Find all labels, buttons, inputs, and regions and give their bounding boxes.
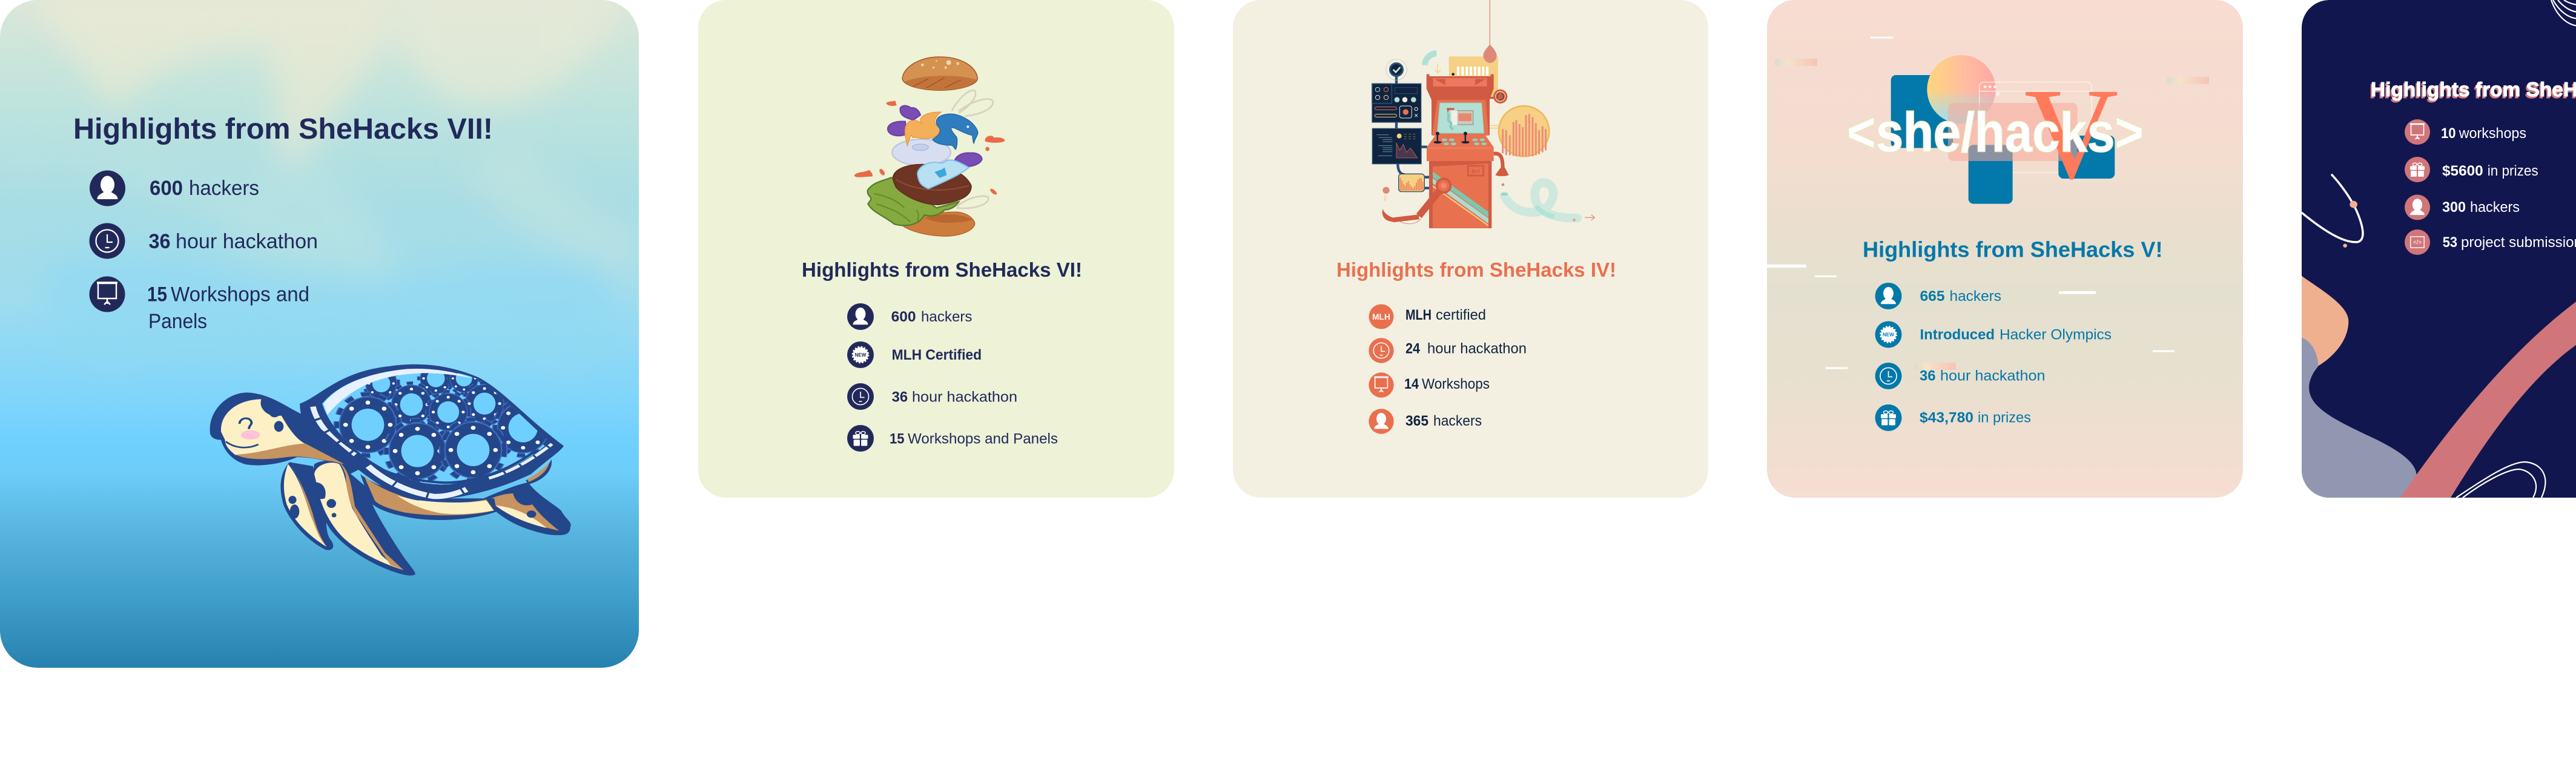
stat: 36 hour hackathon: [90, 223, 318, 259]
icon: clock: [847, 383, 874, 410]
cabinet: [1427, 74, 1494, 135]
purple blobs: [888, 105, 982, 166]
lettuce: [868, 177, 959, 225]
stat: 365 hackers: 365: [1405, 413, 1428, 429]
yellow backing card: [1449, 56, 1498, 97]
icon: gift: [1875, 404, 1901, 431]
stat: 15 workshops and panels: 15: [890, 431, 905, 447]
large V: V: [2024, 61, 2119, 206]
swirl: [1488, 95, 1496, 101]
stat: 24 hour hackathon: hour hackathon: [1427, 340, 1527, 357]
stat: 365 hackers: hackers: [1433, 413, 1482, 429]
illustration: arcade machine with robot arm: [1372, 0, 1594, 228]
heading: Highlights from SheHacks V!: [1863, 237, 2163, 262]
stat: 36 hour hackathon: hour hackathon: [176, 230, 318, 253]
stat: 36 hour hackathon: 36: [892, 389, 908, 406]
pink band: [2400, 286, 2576, 498]
bottom bun: [898, 212, 975, 236]
stat: MLH certified: [1369, 304, 1486, 329]
shell rim: [323, 369, 473, 415]
stat: 36 hour hackathon: 36: [1920, 368, 1935, 384]
stat: 15 workshops and panels: [90, 276, 309, 333]
shell: [300, 364, 564, 501]
peach blob: [2302, 276, 2348, 373]
icon: clock: [1369, 338, 1394, 363]
stat: 24 hour hackathon: 24: [1405, 340, 1421, 357]
hanging drop: [1488, 0, 1491, 45]
stat: 365 hackers: [1369, 409, 1482, 434]
stat: 10 workshops: [2405, 119, 2526, 145]
browser window outline: [1980, 82, 2092, 173]
stat: 14 workshops: Workshops: [1422, 376, 1490, 392]
front flipper: [314, 461, 415, 576]
stat: prizes: $43,780: [1920, 409, 1973, 426]
stat: 600 hackers: [847, 303, 973, 330]
panel: SheHacks VII: [0, 0, 639, 668]
stat: prizes: [1875, 404, 2031, 431]
stat: 15 workshops and panels: Panels: [148, 310, 207, 333]
stat: MLH certified: MLH: [1405, 307, 1432, 323]
wordmark: <she/hacks>: [1847, 101, 2144, 163]
stat: prizes: in prizes: [1978, 409, 2031, 426]
robot arm: [1419, 186, 1444, 216]
stat: 36 hour hackathon: [847, 383, 1017, 410]
nozzle: [1494, 154, 1503, 168]
panel: SheHacks V: [1767, 0, 2243, 498]
illustration: arcade machine with robot arm: $>I: [1471, 168, 1480, 174]
arcade screen: [1437, 103, 1484, 133]
top bun: [902, 57, 977, 90]
stat: 36 hour hackathon: hour hackathon: [1940, 368, 2046, 384]
icon: projector: [90, 276, 125, 312]
stat: 600 hackers: hackers: [189, 177, 259, 200]
icon: person: [1875, 283, 1901, 309]
heading: Highlights from SheHacks IV!: [1336, 259, 1616, 281]
illustration: turtle with gears on shell: [210, 361, 571, 576]
stat: 600 hackers: hackers: [921, 309, 973, 325]
stat: 300 hackers: [2405, 195, 2520, 220]
stat: 10 workshops: 10: [2441, 125, 2456, 142]
icon: person: [1369, 409, 1394, 434]
stat: MLH certified: MLH Certified: [892, 347, 982, 363]
heading: Highlights from SheHacks VI!: [802, 259, 1082, 282]
panel: SheHacks VI: [698, 0, 1174, 498]
shell gears: [337, 361, 551, 482]
card background: [0, 0, 639, 668]
CD: [892, 139, 951, 165]
stat: 15 workshops and panels: Workshops and Panels: [908, 431, 1058, 447]
stat: 300 hackers: hackers: [2470, 199, 2520, 216]
icon: gift: [2405, 157, 2430, 182]
stat: 53 project submissions: [2405, 229, 2576, 255]
stat: introduced hacker olympics: [1875, 321, 2112, 348]
icon: clock: [90, 223, 125, 259]
blue block left: [1891, 75, 1953, 148]
top right swirl: [2551, 0, 2576, 26]
card background: [1233, 0, 1708, 498]
panel: SheHacks III: [2302, 0, 2576, 499]
stat: introduced hacker olympics: Hacker Olympics: [2000, 327, 2112, 343]
heading: Highlights from SheHacks VII!: [73, 113, 493, 145]
stat: 15 workshops and panels: 15: [147, 283, 167, 306]
icon: new badge: [1875, 321, 1901, 348]
icon: code: </>: [2413, 239, 2422, 246]
stat: 36 hour hackathon: [1875, 363, 2046, 389]
icon: new badge: [847, 341, 874, 368]
stat: MLH certified: certified: [1436, 307, 1486, 323]
stat: introduced hacker olympics: Introduced: [1920, 327, 1995, 343]
coin slot: [1468, 166, 1484, 176]
big chart circle: [1488, 125, 1499, 128]
left panels: [1372, 59, 1429, 192]
icon: gift: [847, 425, 874, 452]
illustration: exploded burger with logos: [854, 57, 1005, 236]
stat: 300 hackers: 300: [2442, 199, 2466, 216]
stat: 665 hackers: 665: [1920, 288, 1945, 305]
stat: 36 hour hackathon: hour hackathon: [912, 389, 1017, 406]
icon: new badge: NEW: [855, 352, 867, 358]
stat: 14 workshops: [1369, 372, 1490, 398]
arrow: [1585, 215, 1594, 220]
stat: 36 hour hackathon: 36: [149, 230, 171, 253]
ketchup splashes: [854, 100, 1005, 196]
head and neck: [210, 392, 366, 474]
gradient sphere: [1927, 55, 1996, 124]
icon: person: [2405, 195, 2430, 220]
back flipper: [280, 462, 333, 550]
rear flipper: [484, 483, 571, 535]
console: [1427, 136, 1494, 161]
stat: 10 workshops: workshops: [2459, 125, 2526, 142]
card background: [698, 0, 1174, 498]
stat: 15 workshops and panels: Workshops and: [171, 283, 309, 306]
belly: [360, 474, 497, 520]
stat: 53 project submissions: 53: [2443, 234, 2457, 251]
twitter cloud: [917, 160, 969, 189]
patty: [893, 164, 971, 205]
icon: new badge: NEW: [1883, 332, 1894, 337]
card background: [1767, 0, 2243, 498]
python blue sauce: [933, 114, 978, 150]
illustration: she/hacks V logo: [1847, 55, 2144, 206]
stat: MLH certified: [847, 341, 982, 368]
icon: person: [90, 171, 125, 206]
icon: projector: [1369, 372, 1394, 398]
cheese: [905, 112, 941, 146]
icon: MLH: [1369, 304, 1394, 329]
blue block right: [2058, 136, 2115, 179]
panel: SheHacks IV: [1233, 0, 1708, 498]
onion rings: [952, 90, 993, 208]
translucent pink block: [1948, 103, 2078, 161]
card background: [2302, 0, 2576, 498]
icon: person: [847, 303, 874, 330]
stat: 600 hackers: 600: [891, 309, 916, 325]
bottom loops: [2456, 462, 2545, 498]
stat: 600 hackers: [90, 171, 259, 206]
stat: prizes: in prizes: [2488, 163, 2538, 179]
lower cabinet: [1429, 161, 1491, 228]
orbit line: [2302, 174, 2363, 242]
stat: prizes: [2405, 157, 2538, 182]
stat: 15 workshops and panels: [847, 425, 1058, 452]
stat: prizes: $5600: [2442, 163, 2483, 179]
icon: MLH: MLH: [1372, 312, 1390, 321]
grey blob: [2302, 337, 2417, 499]
teal hose: [1504, 183, 1577, 218]
stat: 665 hackers: hackers: [1950, 288, 2001, 305]
stat: 14 workshops: 14: [1404, 376, 1419, 392]
blue block lower: [1969, 145, 2013, 204]
stat: 665 hackers: [1875, 283, 2001, 309]
icon: clock: [1875, 363, 1901, 389]
stat: 24 hour hackathon: [1369, 338, 1527, 363]
icon: projector: [2405, 119, 2430, 145]
icon: code: [2405, 229, 2430, 255]
stat: 600 hackers: 600: [150, 177, 183, 200]
